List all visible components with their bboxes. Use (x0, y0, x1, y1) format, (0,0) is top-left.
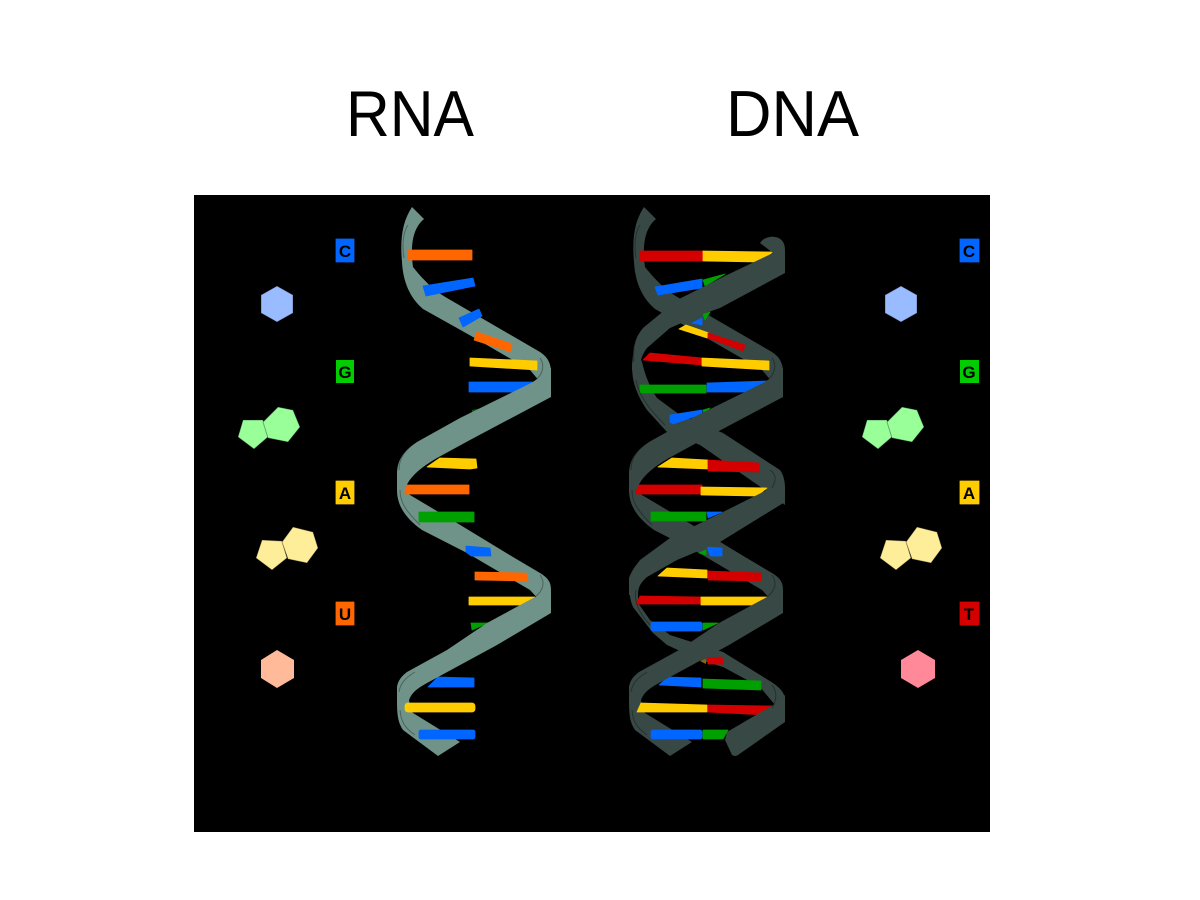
chart: DNA double helix (629, 207, 785, 756)
key: cytosine C: C (963, 242, 975, 261)
legend: RNA bases (238, 239, 354, 688)
ribbon: RNA front segments (397, 368, 551, 705)
key: thymine T (960, 602, 979, 625)
icon: adenine rings (256, 527, 318, 570)
key: cytosine C (336, 239, 354, 262)
panel: black diagram background (194, 195, 990, 832)
ribbon: RNA back segments (397, 207, 551, 756)
key: uracil U: U (339, 605, 351, 624)
key: guanine G (960, 360, 979, 383)
key: guanine G: G (962, 363, 976, 382)
title: RNA: RNA (346, 77, 475, 150)
key: cytosine C: C (339, 242, 351, 261)
title: DNA: DNA (726, 77, 860, 150)
icon: guanine rings (238, 407, 300, 449)
key: guanine G (336, 360, 354, 383)
key: uracil U (336, 602, 354, 625)
base pairs: DNA rungs (636, 251, 773, 739)
icon: adenine rings (880, 527, 942, 570)
base pairs: RNA rungs (405, 250, 537, 739)
key: adenine A (960, 481, 979, 504)
key: cytosine C (960, 239, 979, 262)
ribbon: DNA back segments (629, 207, 785, 756)
icon: uracil ring (261, 650, 294, 688)
icon: thymine ring (901, 650, 935, 688)
key: guanine G: G (338, 363, 352, 382)
icon: guanine rings (862, 407, 924, 449)
ribbon: DNA front segments (629, 237, 785, 756)
key: thymine T: T (964, 605, 975, 624)
icon: cytosine ring (261, 286, 293, 322)
icon: cytosine ring (885, 286, 917, 322)
legend: DNA bases (862, 239, 979, 688)
key: adenine A: A (963, 484, 975, 503)
key: adenine A (336, 481, 354, 504)
chart: RNA single helix (397, 207, 551, 756)
key: adenine A: A (339, 484, 351, 503)
